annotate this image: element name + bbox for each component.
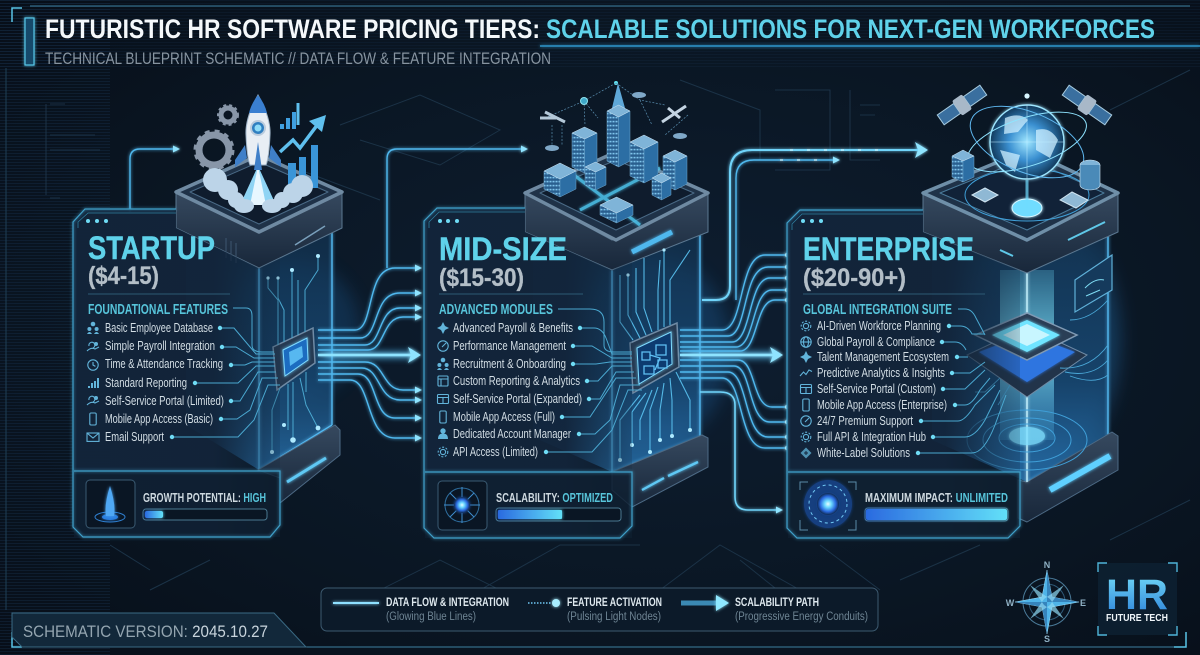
- legend: feature activation: (Pulsing Light Nodes): [567, 611, 661, 623]
- pillar: mid-size: [525, 81, 708, 507]
- icon: rocket launch: [203, 95, 313, 213]
- logo: HR Future Tech: [1098, 563, 1177, 635]
- legend: data flow: [333, 597, 509, 623]
- feature: Simple Payroll Integration: Simple Payroll Integration: [105, 339, 215, 353]
- feature: Predictive Analytics & Insights: Predictive Analytics & Insights: [817, 366, 945, 380]
- chip: enterprise stack: [967, 313, 1087, 397]
- window dots: [438, 219, 459, 223]
- feature: 24/7 Premium Support: 24/7 Premium Support: [817, 414, 913, 428]
- feature: White-Label Solutions: White-Label Solutions: [817, 446, 910, 460]
- metric: growth potential: [143, 490, 267, 520]
- section heading: ADVANCED MODULES: [439, 302, 553, 318]
- feature: Time & Attendance Tracking: Time & Attendance Tracking: [105, 357, 223, 371]
- feature: Basic Employee Database: Basic Employee Database: [105, 321, 213, 335]
- schematic version tag: [12, 613, 306, 647]
- title underline glow: [540, 45, 1200, 47]
- circuit traces: enterprise pillar: [975, 300, 1108, 405]
- title: FUTURISTIC HR SOFTWARE PRICING TIERS:: [45, 14, 540, 44]
- tier name: STARTUP: [88, 230, 215, 266]
- data flow: mid-size to enterprise: [680, 253, 789, 510]
- compass rose: N: [1044, 560, 1050, 570]
- metric: maximum impact: MAXIMUM IMPACT: UNLIMITED: [865, 490, 1008, 505]
- feature: API Access (Limited): API Access (Limited): [453, 445, 538, 459]
- compass rose: E: [1080, 598, 1086, 608]
- icon: scalability hub: [438, 481, 487, 530]
- icon: gears: [195, 105, 238, 169]
- tier name: ENTERPRISE: [803, 231, 974, 267]
- tier price: ($15-30): [439, 264, 524, 292]
- legend: [321, 588, 878, 631]
- title accent bar: [25, 18, 34, 65]
- feature list: [800, 319, 959, 460]
- feature: Self-Service Portal (Custom): Self-Service Portal (Custom): [817, 382, 936, 396]
- tier name: MID-SIZE: [439, 231, 567, 267]
- window dots: [801, 219, 823, 223]
- feature: Performance Management: Performance Management: [453, 339, 566, 353]
- icon: growth chart: [280, 103, 326, 188]
- logo: HR Future Tech: FUTURE TECH: [1106, 612, 1168, 624]
- arrow: flow to mid-size city: [387, 149, 526, 268]
- feature: Self-Service Portal (Limited): Self-Service Portal (Limited): [105, 394, 224, 408]
- panel: mid-size: [424, 208, 642, 538]
- tier price: ($4-15): [88, 262, 159, 290]
- arrow: entry flow into startup tier: [130, 149, 178, 212]
- data column: [967, 270, 1087, 482]
- pillar: enterprise: [923, 83, 1118, 522]
- icon: globe with satellites: [936, 83, 1113, 221]
- pillar: startup: [176, 95, 342, 503]
- legend: scalability path: SCALABILITY PATH: [735, 597, 819, 609]
- compass rose: W: [1006, 598, 1015, 608]
- arrow: flow to enterprise hub: [702, 150, 918, 300]
- legend: feature activation: FEATURE ACTIVATION: [567, 597, 662, 609]
- feature: Mobile App Access (Enterprise): Mobile App Access (Enterprise): [817, 398, 947, 412]
- feature traces: [174, 308, 280, 437]
- metric: maximum impact: [865, 490, 1008, 521]
- subtitle: TECHNICAL BLUEPRINT SCHEMATIC // DATA FLOW & FEATURE INTEGRATION: [45, 50, 551, 68]
- feature: Full API & Integration Hub: Full API & Integration Hub: [817, 430, 926, 444]
- panel: enterprise: [787, 210, 1020, 538]
- circuit traces: mid-size pillar: [618, 248, 692, 462]
- feature: Email Support: Email Support: [105, 430, 164, 444]
- circuit traces: startup pillar: [266, 254, 320, 454]
- feature: Self-Service Portal (Expanded): Self-Service Portal (Expanded): [453, 392, 582, 406]
- compass rose: [1006, 560, 1086, 644]
- legend: feature activation: [528, 597, 662, 623]
- compass rose: S: [1044, 634, 1050, 644]
- feature: Global Payroll & Compliance: Global Payroll & Compliance: [817, 335, 935, 349]
- metric: scalability: [496, 490, 621, 521]
- metric: scalability: SCALABILITY: OPTIMIZED: [496, 490, 613, 505]
- legend: scalability path: (Progressive Energy Conduits): [735, 611, 868, 623]
- icon: maximum impact orb: [800, 480, 856, 530]
- legend: scalability path: [681, 595, 868, 623]
- legend: data flow: (Glowing Blue Lines): [386, 611, 476, 623]
- section heading: GLOBAL INTEGRATION SUITE: [803, 302, 952, 318]
- data flow: startup to mid-size: [318, 268, 420, 438]
- section heading: FOUNDATIONAL FEATURES: [88, 302, 228, 318]
- tier price: ($20-90+): [803, 264, 906, 292]
- icon: growth flame: [86, 480, 135, 528]
- feature traces: [548, 309, 642, 452]
- feature: Talent Management Ecosystem: Talent Management Ecosystem: [817, 350, 949, 364]
- feature: Recruitment & Onboarding: Recruitment & Onboarding: [453, 357, 566, 371]
- chip: startup: [273, 328, 315, 390]
- title: [45, 14, 1155, 44]
- feature: Standard Reporting: Standard Reporting: [105, 376, 187, 390]
- feature traces: [920, 309, 1006, 453]
- feature list: [437, 321, 591, 459]
- metric: growth potential: GROWTH POTENTIAL: HIGH: [143, 490, 266, 505]
- feature list: [87, 321, 233, 444]
- legend: data flow: DATA FLOW & INTEGRATION: [386, 597, 509, 609]
- panel: startup: [73, 209, 280, 537]
- icon: hologram screen: [1075, 255, 1112, 312]
- feature: Mobile App Access (Basic): Mobile App Access (Basic): [105, 412, 213, 426]
- chip: mid-size: [630, 323, 679, 393]
- feature: Dedicated Account Manager: Dedicated Account Manager: [453, 427, 571, 441]
- feature: AI-Driven Workforce Planning: AI-Driven Workforce Planning: [817, 319, 941, 333]
- feature: Advanced Payroll & Benefits: Advanced Payroll & Benefits: [453, 321, 573, 335]
- feature: Mobile App Access (Full): Mobile App Access (Full): [453, 410, 555, 424]
- logo: HR Future Tech: HR: [1106, 571, 1168, 619]
- feature: Custom Reporting & Analytics: Custom Reporting & Analytics: [453, 374, 580, 388]
- schematic version tag: SCHEMATIC VERSION: 2045.10.27: [23, 623, 268, 641]
- window dots: [86, 219, 108, 223]
- icon: city skyline: [540, 81, 688, 223]
